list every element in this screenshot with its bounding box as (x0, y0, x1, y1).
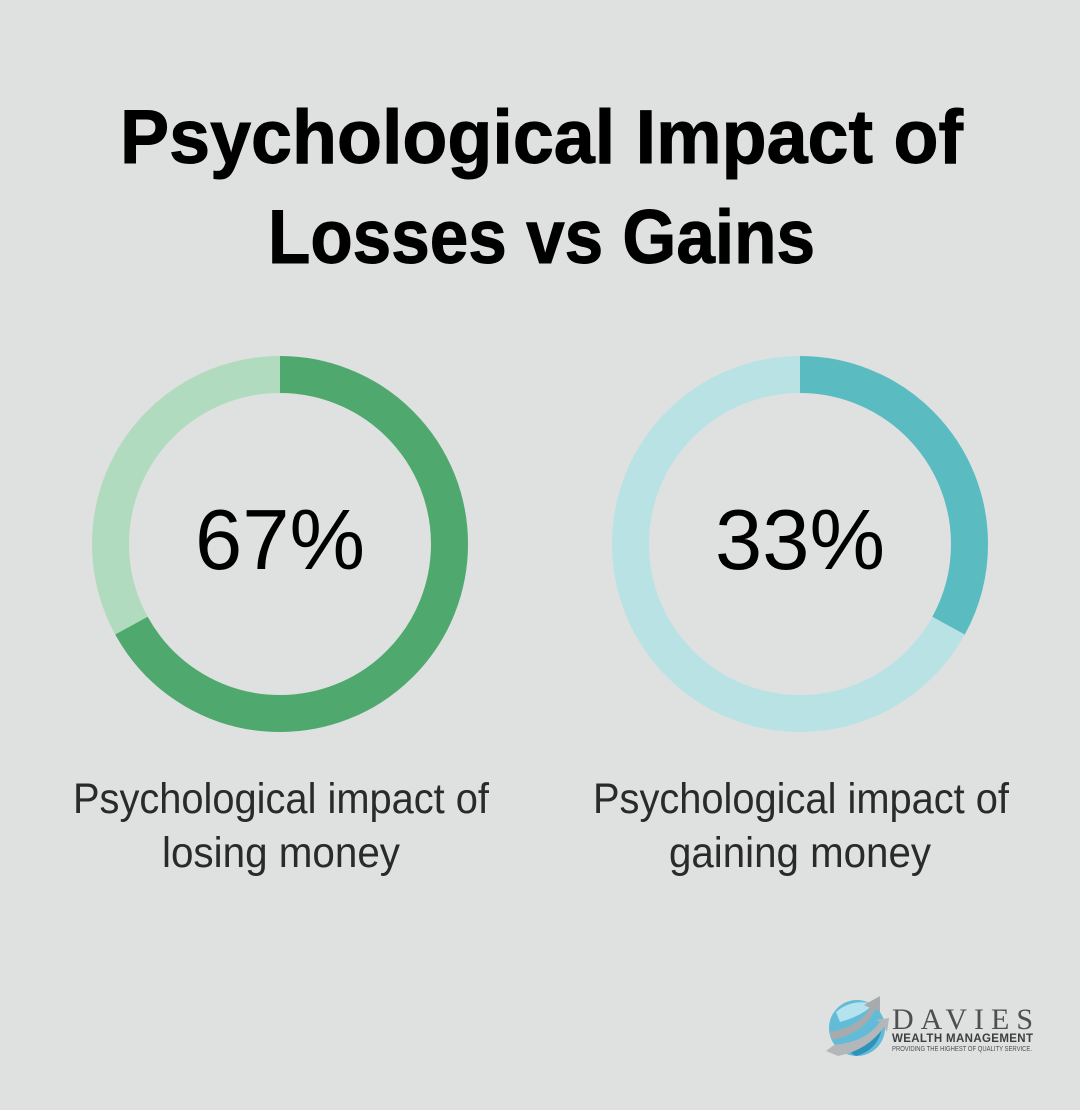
panel: losing money (73, 374, 490, 877)
label: losing money: Psychological impact of (73, 775, 490, 823)
wordmark subtitle: WEALTH MANAGEMENT (892, 1033, 1033, 1045)
wordmark: DAVIES (892, 1003, 1033, 1036)
title: Psychological Impact of (120, 95, 964, 180)
logo: Davies Wealth Management (826, 996, 1033, 1056)
tagline: PROVIDING THE HIGHEST OF QUALITY SERVICE. (892, 1044, 1032, 1053)
value: 33%: 33% (715, 493, 885, 588)
value: 67%: 67% (195, 493, 365, 588)
label: gaining money (593, 775, 1010, 877)
label: gaining money: gaining money (669, 829, 931, 877)
icon: globe with arrows (826, 996, 889, 1056)
title: Losses vs Gains (268, 195, 815, 280)
label: gaining money: Psychological impact of (593, 775, 1010, 823)
label: losing money (73, 775, 490, 877)
panel: gaining money (593, 374, 1010, 877)
donut chart: 33% (630, 374, 970, 714)
title (120, 95, 964, 280)
label: losing money: losing money (162, 829, 400, 877)
donut chart: 67% (110, 374, 450, 714)
